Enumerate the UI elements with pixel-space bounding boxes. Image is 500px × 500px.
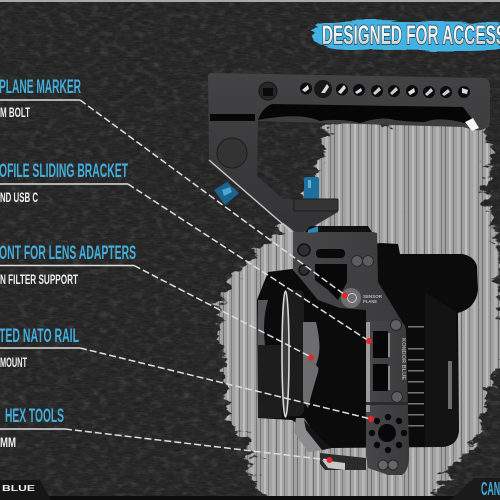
sensor plane marker: PLANE	[363, 299, 377, 304]
footer strip: BLUE	[2, 484, 36, 493]
bottom cage bar	[320, 453, 366, 470]
callout: sliding bracket: ND USB C	[0, 190, 38, 205]
handle screw	[259, 82, 277, 100]
handle clamp block	[294, 199, 338, 211]
handle rail holes	[300, 80, 470, 98]
callout: NATO rail: MOUNT	[0, 355, 27, 370]
handle grip opening	[258, 104, 476, 124]
callout: hex tools: MM	[0, 435, 16, 450]
callout: hex tools: HEX TOOLS	[5, 406, 64, 427]
callout: hex tools	[0, 406, 332, 463]
callout: NATO rail: TED NATO RAIL	[0, 326, 79, 347]
bracket logo: KONDOR BLUE	[400, 338, 406, 381]
callout: lens adapters mount: ONT FOR LENS ADAPTERS	[0, 243, 136, 264]
cage top plate	[293, 226, 404, 330]
top handle	[208, 73, 490, 233]
callout: NATO rail	[0, 326, 374, 422]
callout: sliding bracket: OFILE SLIDING BRACKET	[0, 161, 128, 182]
cooling fins	[408, 326, 424, 426]
callout: lens adapters mount: N FILTER SUPPORT	[0, 272, 78, 287]
callout: sensor plane marker: M BOLT	[0, 105, 30, 120]
accessory hole pattern	[369, 414, 407, 453]
title banner	[312, 20, 500, 51]
sensor plane marker	[341, 288, 383, 308]
blue thumb screws	[214, 177, 319, 205]
callout: lens adapters mount	[0, 243, 314, 360]
footer corner panel	[450, 478, 500, 500]
handle thumb hole	[217, 138, 247, 168]
callout: sensor plane marker: PLANE MARKER	[0, 77, 81, 98]
side bracket plate	[366, 320, 409, 475]
sensor plane marker: SENSOR	[363, 294, 383, 299]
callout: sliding bracket	[0, 161, 372, 344]
bracket slots	[373, 331, 388, 358]
footer strip	[0, 478, 500, 500]
lens mount ring	[282, 290, 332, 452]
footer brand badge	[0, 480, 51, 500]
callout: sensor plane marker	[0, 77, 348, 298]
wood texture splash behind the camera	[211, 123, 500, 496]
camera body	[257, 243, 478, 448]
